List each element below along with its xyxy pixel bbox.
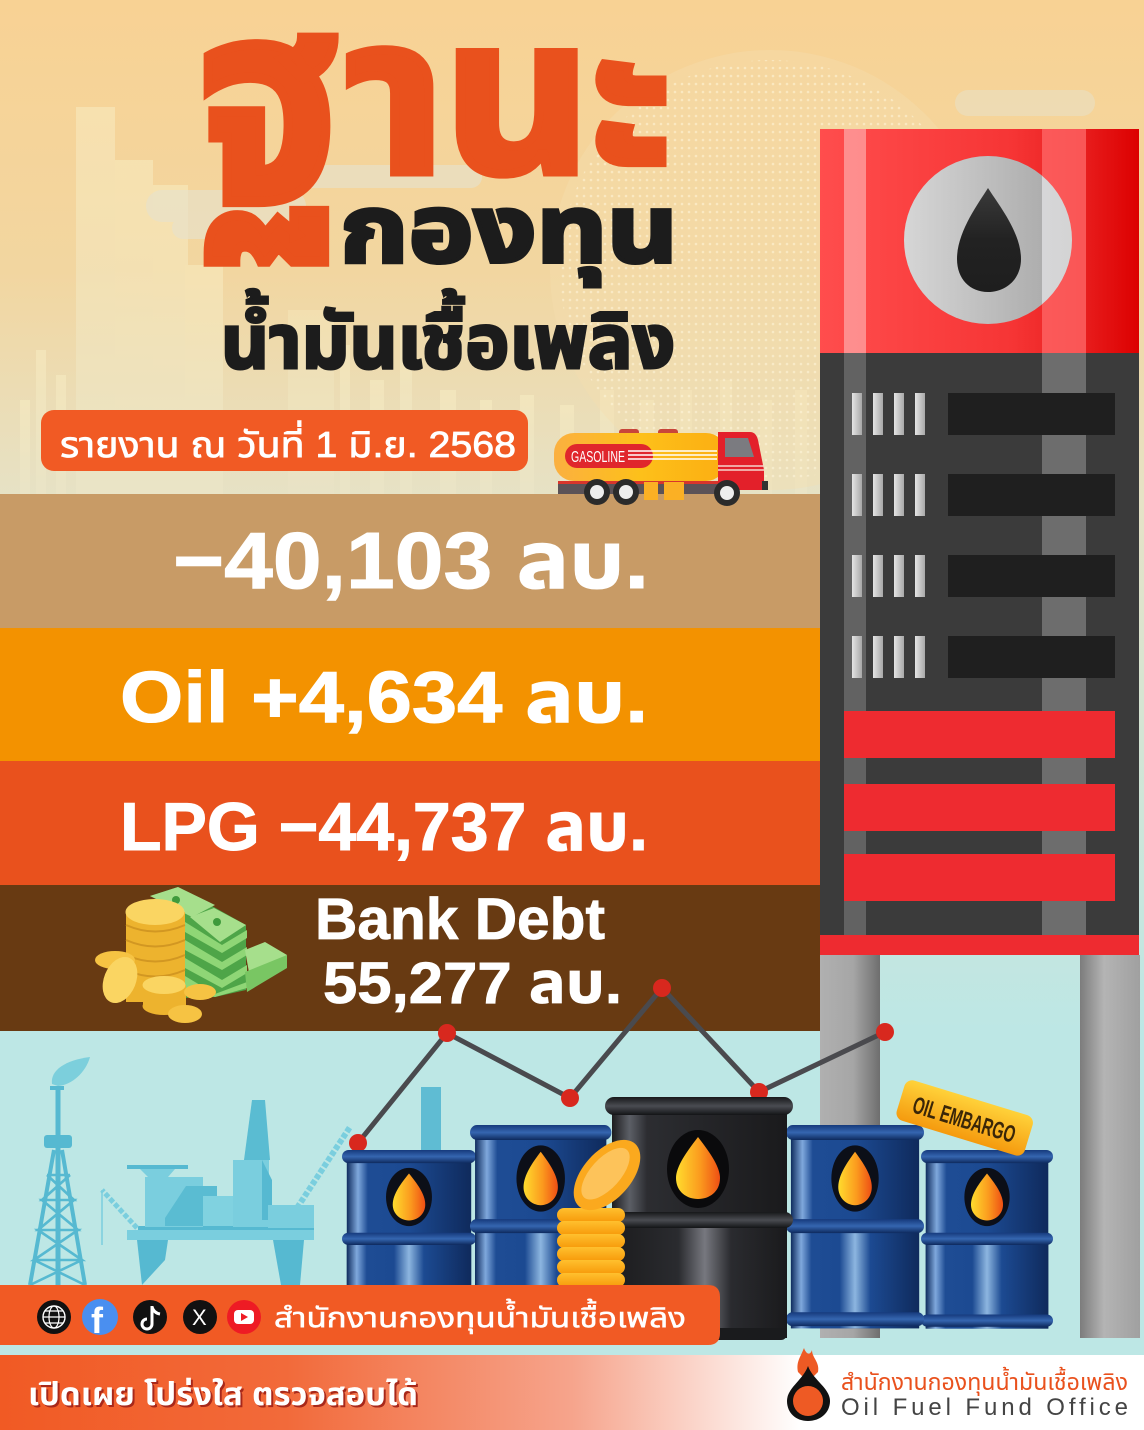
icon: tanker truck	[554, 429, 768, 506]
band: oil account	[0, 628, 820, 761]
footer slogan: เปิดเผย โปร่งใส ตรวจสอบได้	[30, 1378, 420, 1414]
icon: x	[183, 1300, 217, 1334]
tag: oil embargo	[894, 1078, 1035, 1158]
fuel drop emblem	[904, 156, 1072, 324]
barrel: far right blue	[921, 1150, 1053, 1329]
platform	[102, 1087, 441, 1285]
office name thai: สำนักงานกองทุนน้ำมันเชื้อเพลิง	[841, 1366, 1128, 1396]
falling coin	[561, 1128, 653, 1222]
office name english: Oil Fuel Fund Office	[841, 1394, 1128, 1421]
icon: youtube	[227, 1300, 261, 1334]
icon: x: X	[192, 1305, 207, 1330]
band: bank debt	[0, 885, 820, 1031]
band: net fund position: −40,103 ลบ.	[173, 516, 649, 605]
oil barrels group	[342, 1078, 1053, 1340]
report date chip	[41, 410, 528, 471]
price board pole legs	[820, 955, 1140, 1338]
footer slogan: เปิดเผย โปร่งใส ตรวจสอบได้	[28, 1376, 418, 1412]
barrel: inner left blue	[470, 1125, 611, 1328]
title word: fund: กองทุน	[340, 177, 678, 287]
icon: website globe	[37, 1300, 71, 1334]
panel: lower aqua scene background	[0, 1031, 820, 1355]
trend line chart with red nodes	[349, 979, 894, 1152]
title word: status	[198, 0, 672, 262]
icon: tiktok	[133, 1300, 167, 1334]
band: oil account: Oil +4,634 ลบ.	[120, 658, 648, 738]
tag: oil embargo: OIL EMBARGO	[909, 1092, 1019, 1149]
band: LPG account	[0, 761, 820, 885]
price board tower	[820, 129, 1139, 955]
office name on bar: สำนักงานกองทุนน้ำมันเชื้อเพลิง	[274, 1298, 686, 1334]
flare tower	[30, 1057, 90, 1285]
icon: tanker truck: GASOLINE	[571, 449, 625, 466]
band: LPG account: LPG −44,737 ลบ.	[120, 789, 648, 865]
band: bank debt: Bank Debt	[315, 887, 605, 952]
footer strip	[0, 1355, 1144, 1430]
band: bank debt: 55,277 ลบ.	[323, 951, 622, 1016]
icon: facebook: f	[91, 1300, 104, 1341]
oil fuel fund office logo	[787, 1348, 830, 1421]
background: city skyline bars	[20, 107, 807, 494]
offshore scene illustration	[30, 1057, 441, 1285]
band: net fund position	[0, 494, 820, 628]
coin stack	[557, 1208, 625, 1287]
barrel: right blue	[786, 1125, 924, 1328]
background: pale clouds	[146, 90, 1095, 239]
icon: facebook	[82, 1299, 118, 1341]
social media bar	[0, 1285, 720, 1345]
title word: fuel oil: น้ำมันเชื้อเพลิง	[221, 289, 675, 385]
background: dotted globe	[550, 50, 990, 490]
icon: gold coins and banknotes	[95, 887, 287, 1023]
barrel: center black	[605, 1097, 793, 1340]
price display rows	[852, 393, 1115, 678]
barrel: left blue	[342, 1150, 476, 1329]
report date chip: รายงาน ณ วันที่ 1 มิ.ย. 2568	[60, 420, 516, 465]
red stripes	[820, 711, 1139, 955]
